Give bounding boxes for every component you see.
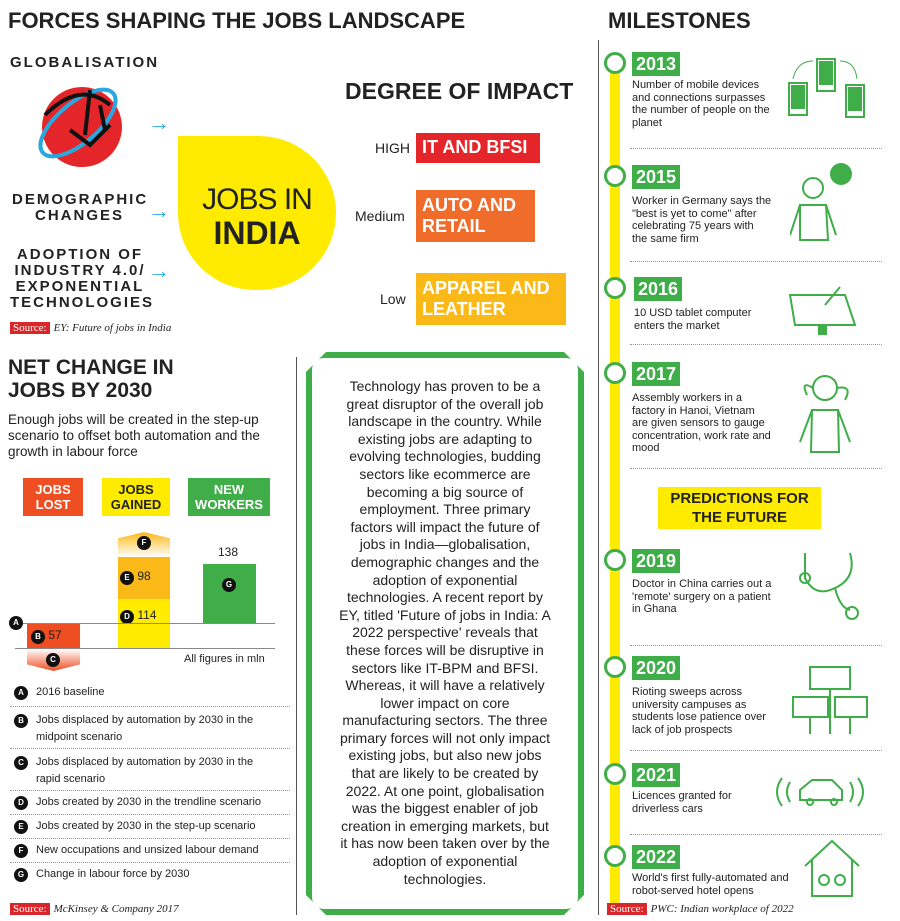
text: Number of mobile devices and connections surpasses the number of people on the planet (632, 79, 770, 128)
text: Rioting sweeps across university campuses as students lose patience over lack of job prospects (632, 686, 766, 736)
net change heading: NET CHANGE IN (8, 356, 174, 379)
legend: Jobs created by 2030 in the step-up scenario (36, 820, 256, 832)
arrow 3: → (148, 258, 170, 283)
milestone 2017 (604, 362, 626, 384)
legend: Jobs displaced by automation by 2030 in the (36, 714, 253, 726)
legend: Change in labour force by 2030 (36, 868, 190, 880)
legend: Jobs created by 2030 in the trendline scenario (36, 796, 261, 808)
bar chart: NEW (214, 482, 244, 497)
legend: 2016 baseline (36, 686, 105, 698)
impact medium: Medium (355, 208, 405, 224)
legend: New occupations and unsized labour demand (36, 844, 259, 856)
text: 2013 (636, 54, 676, 74)
milestone 2015 (604, 165, 626, 187)
icon: globe (38, 87, 122, 167)
predictions box (658, 487, 821, 529)
legend: rapid scenario (36, 773, 105, 785)
legend: D (18, 798, 24, 807)
net change intro: Enough jobs will be created in the step-up scenario to offset both automation and the growth in labour force (8, 412, 260, 459)
milestone 2021 (604, 763, 626, 785)
source: Source: EY: Future of jobs in India (13, 322, 171, 334)
bar chart: JOBS (35, 482, 71, 497)
text: Assembly workers in a factory in Hanoi, Vietnam are given sensors to gauge concentration, work rate and mood (632, 392, 771, 454)
milestone 2019 (604, 549, 626, 571)
label: globalisation: GLOBALISATION (10, 54, 159, 71)
predictions box: THE FUTURE (692, 509, 787, 526)
bar chart: E (124, 573, 130, 582)
milestones heading: MILESTONES (608, 8, 751, 33)
text: Doctor in China carries out a 'remote' surgery on a patient in Ghana (632, 578, 771, 615)
impact medium (355, 190, 535, 242)
text: 2015 (636, 167, 676, 187)
legend: E (18, 822, 24, 831)
legend: G (18, 870, 24, 879)
legend: A (18, 688, 24, 697)
net change heading: JOBS BY 2030 (8, 379, 152, 402)
legend: C (18, 758, 24, 767)
label: adoption: ADOPTION OF INDUSTRY 4.0/ EXPONENTIAL TECHNOLOGIES (10, 246, 154, 311)
text box: Technology has proven to be a great disruptor of the overall job landscape in the country. While existing jobs are adapting to evolving technologies, budding sectors like ecommerce are becoming a big source of employment. Three primary factors will impact the future of jobs in India—globalisation, demographic changes and the adoption of exponential technologies. A recent report by EY, titled 'Future of jobs in India: A 2022 perspective' reveals that these forces will be disruptive in sectors like IT-BPM and BFSI. Whereas, it will have a relatively lower impact on core manufacturing sectors. The three primary forces will not only impact existing jobs, but also new jobs that are likely to be created by 2022. At one point, globalisation was the biggest enabler of job creation in emerging markets, but it has now been taken over by the adoption of exponential technologies. (339, 378, 551, 887)
text: World's first fully-automated and robot-served hotel opens (632, 872, 789, 896)
bar chart: C (50, 655, 56, 664)
arrow 1: → (148, 110, 170, 135)
impact low: APPAREL AND LEATHER (422, 278, 550, 319)
impact low: Low (380, 291, 406, 307)
source: Source: McKinsey & Company 2017 (13, 903, 179, 915)
text box (306, 352, 584, 915)
legend (10, 686, 290, 882)
bar chart: GAINED (111, 497, 161, 512)
milestone 2022 (604, 845, 626, 867)
bar chart: D (124, 612, 130, 621)
milestone 2020 (604, 656, 626, 678)
jobs in india drop: INDIA (213, 215, 301, 251)
label: demographic: DEMOGRAPHIC CHANGES (12, 191, 148, 224)
legend: Jobs displaced by automation by 2030 in the (36, 756, 253, 768)
text: Worker in Germany says the "best is yet to come" after celebrating 75 years with the same firm (632, 195, 771, 244)
bar chart: G (226, 580, 232, 589)
text: 2016 (638, 279, 678, 299)
jobs in india drop: JOBS IN (202, 183, 312, 216)
degree of impact heading: DEGREE OF IMPACT (345, 78, 573, 104)
text: 2019 (636, 551, 676, 571)
bar chart: F (142, 538, 146, 547)
text: 2017 (636, 364, 676, 384)
bar chart: 57 (48, 628, 62, 642)
text: Licences granted for driverless cars (632, 790, 732, 814)
bar chart: 114 (137, 608, 156, 622)
predictions box: PREDICTIONS FOR (670, 490, 809, 507)
bar chart (9, 478, 275, 671)
source: Source: PWC: Indian workplace of 2022 (610, 903, 794, 915)
impact high: IT AND BFSI (422, 137, 527, 157)
legend: B (18, 716, 24, 725)
text: 10 USD tablet computer enters the market (634, 307, 751, 332)
net change heading (8, 356, 174, 402)
impact medium: AUTO AND RETAIL (422, 195, 516, 236)
milestone 2016 (604, 277, 626, 299)
legend: midpoint scenario (36, 731, 122, 743)
jobs in india drop (178, 136, 336, 290)
text: 2020 (636, 658, 676, 678)
bar chart: A (13, 618, 19, 627)
bar chart: 98 (137, 569, 151, 583)
impact low (380, 273, 566, 325)
bar chart: LOST (36, 497, 70, 512)
bar chart: All figures in mln (184, 653, 265, 665)
impact high (375, 133, 540, 163)
bar chart: 138 (218, 545, 238, 559)
impact high: HIGH (375, 140, 410, 156)
milestone 2013 (604, 52, 626, 74)
text: 2022 (636, 847, 676, 867)
bar chart: B (35, 632, 41, 641)
title: FORCES SHAPING THE JOBS LANDSCAPE (8, 8, 465, 33)
bar chart: JOBS (118, 482, 154, 497)
text: 2021 (636, 765, 676, 785)
arrow 2: → (148, 198, 170, 223)
bar chart: WORKERS (195, 497, 263, 512)
legend: F (19, 846, 23, 855)
timeline line (610, 58, 620, 903)
